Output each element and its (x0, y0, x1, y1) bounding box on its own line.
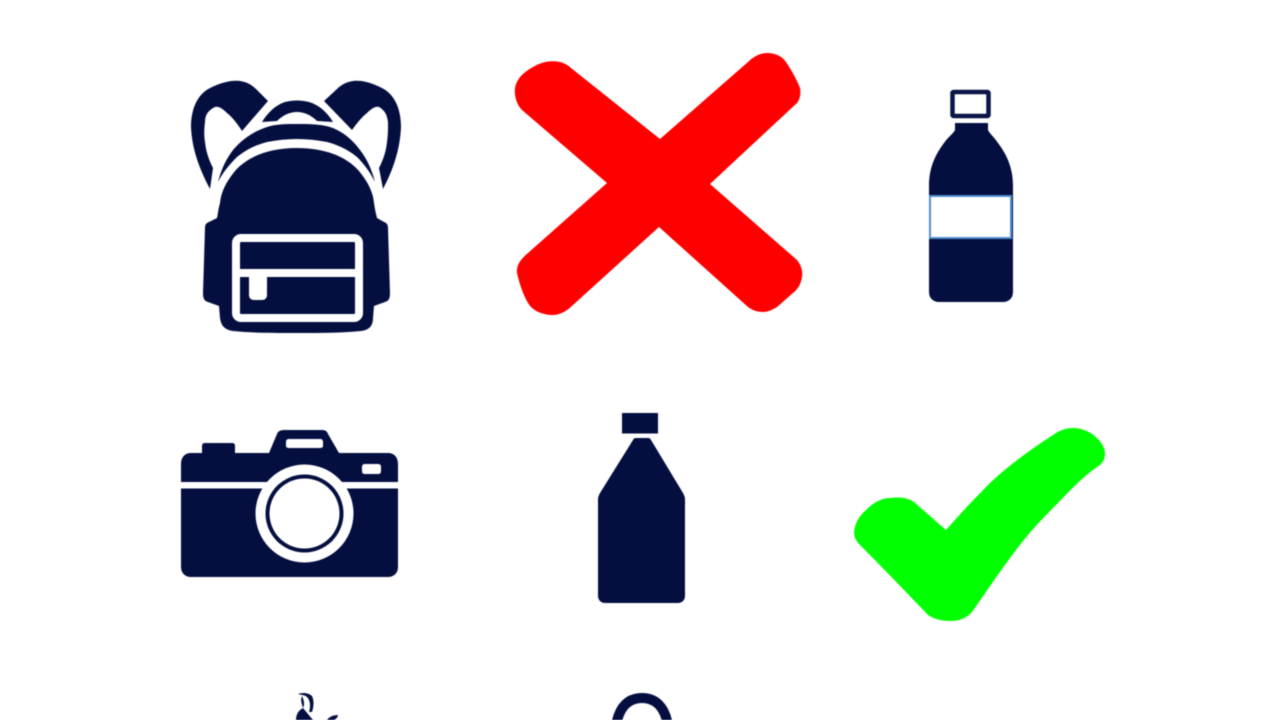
bottle label (930, 196, 1011, 238)
icon: partial bag handle at bottom edge (616, 698, 668, 720)
bottle body (929, 123, 1013, 302)
bottle cap (952, 92, 988, 116)
bottle cap (622, 413, 658, 434)
icon: green check mark (854, 428, 1105, 621)
camera band (180, 482, 399, 488)
icon: solid bottle (598, 413, 685, 603)
camera lens (256, 464, 354, 562)
icon: camera (180, 430, 399, 577)
icon: bottle with label (929, 92, 1013, 302)
bottle body (598, 438, 685, 603)
icon: partial flame at bottom edge (296, 693, 338, 720)
icon: backpack (191, 81, 401, 333)
backpack pocket (236, 238, 359, 318)
icon: red cross (515, 53, 802, 315)
